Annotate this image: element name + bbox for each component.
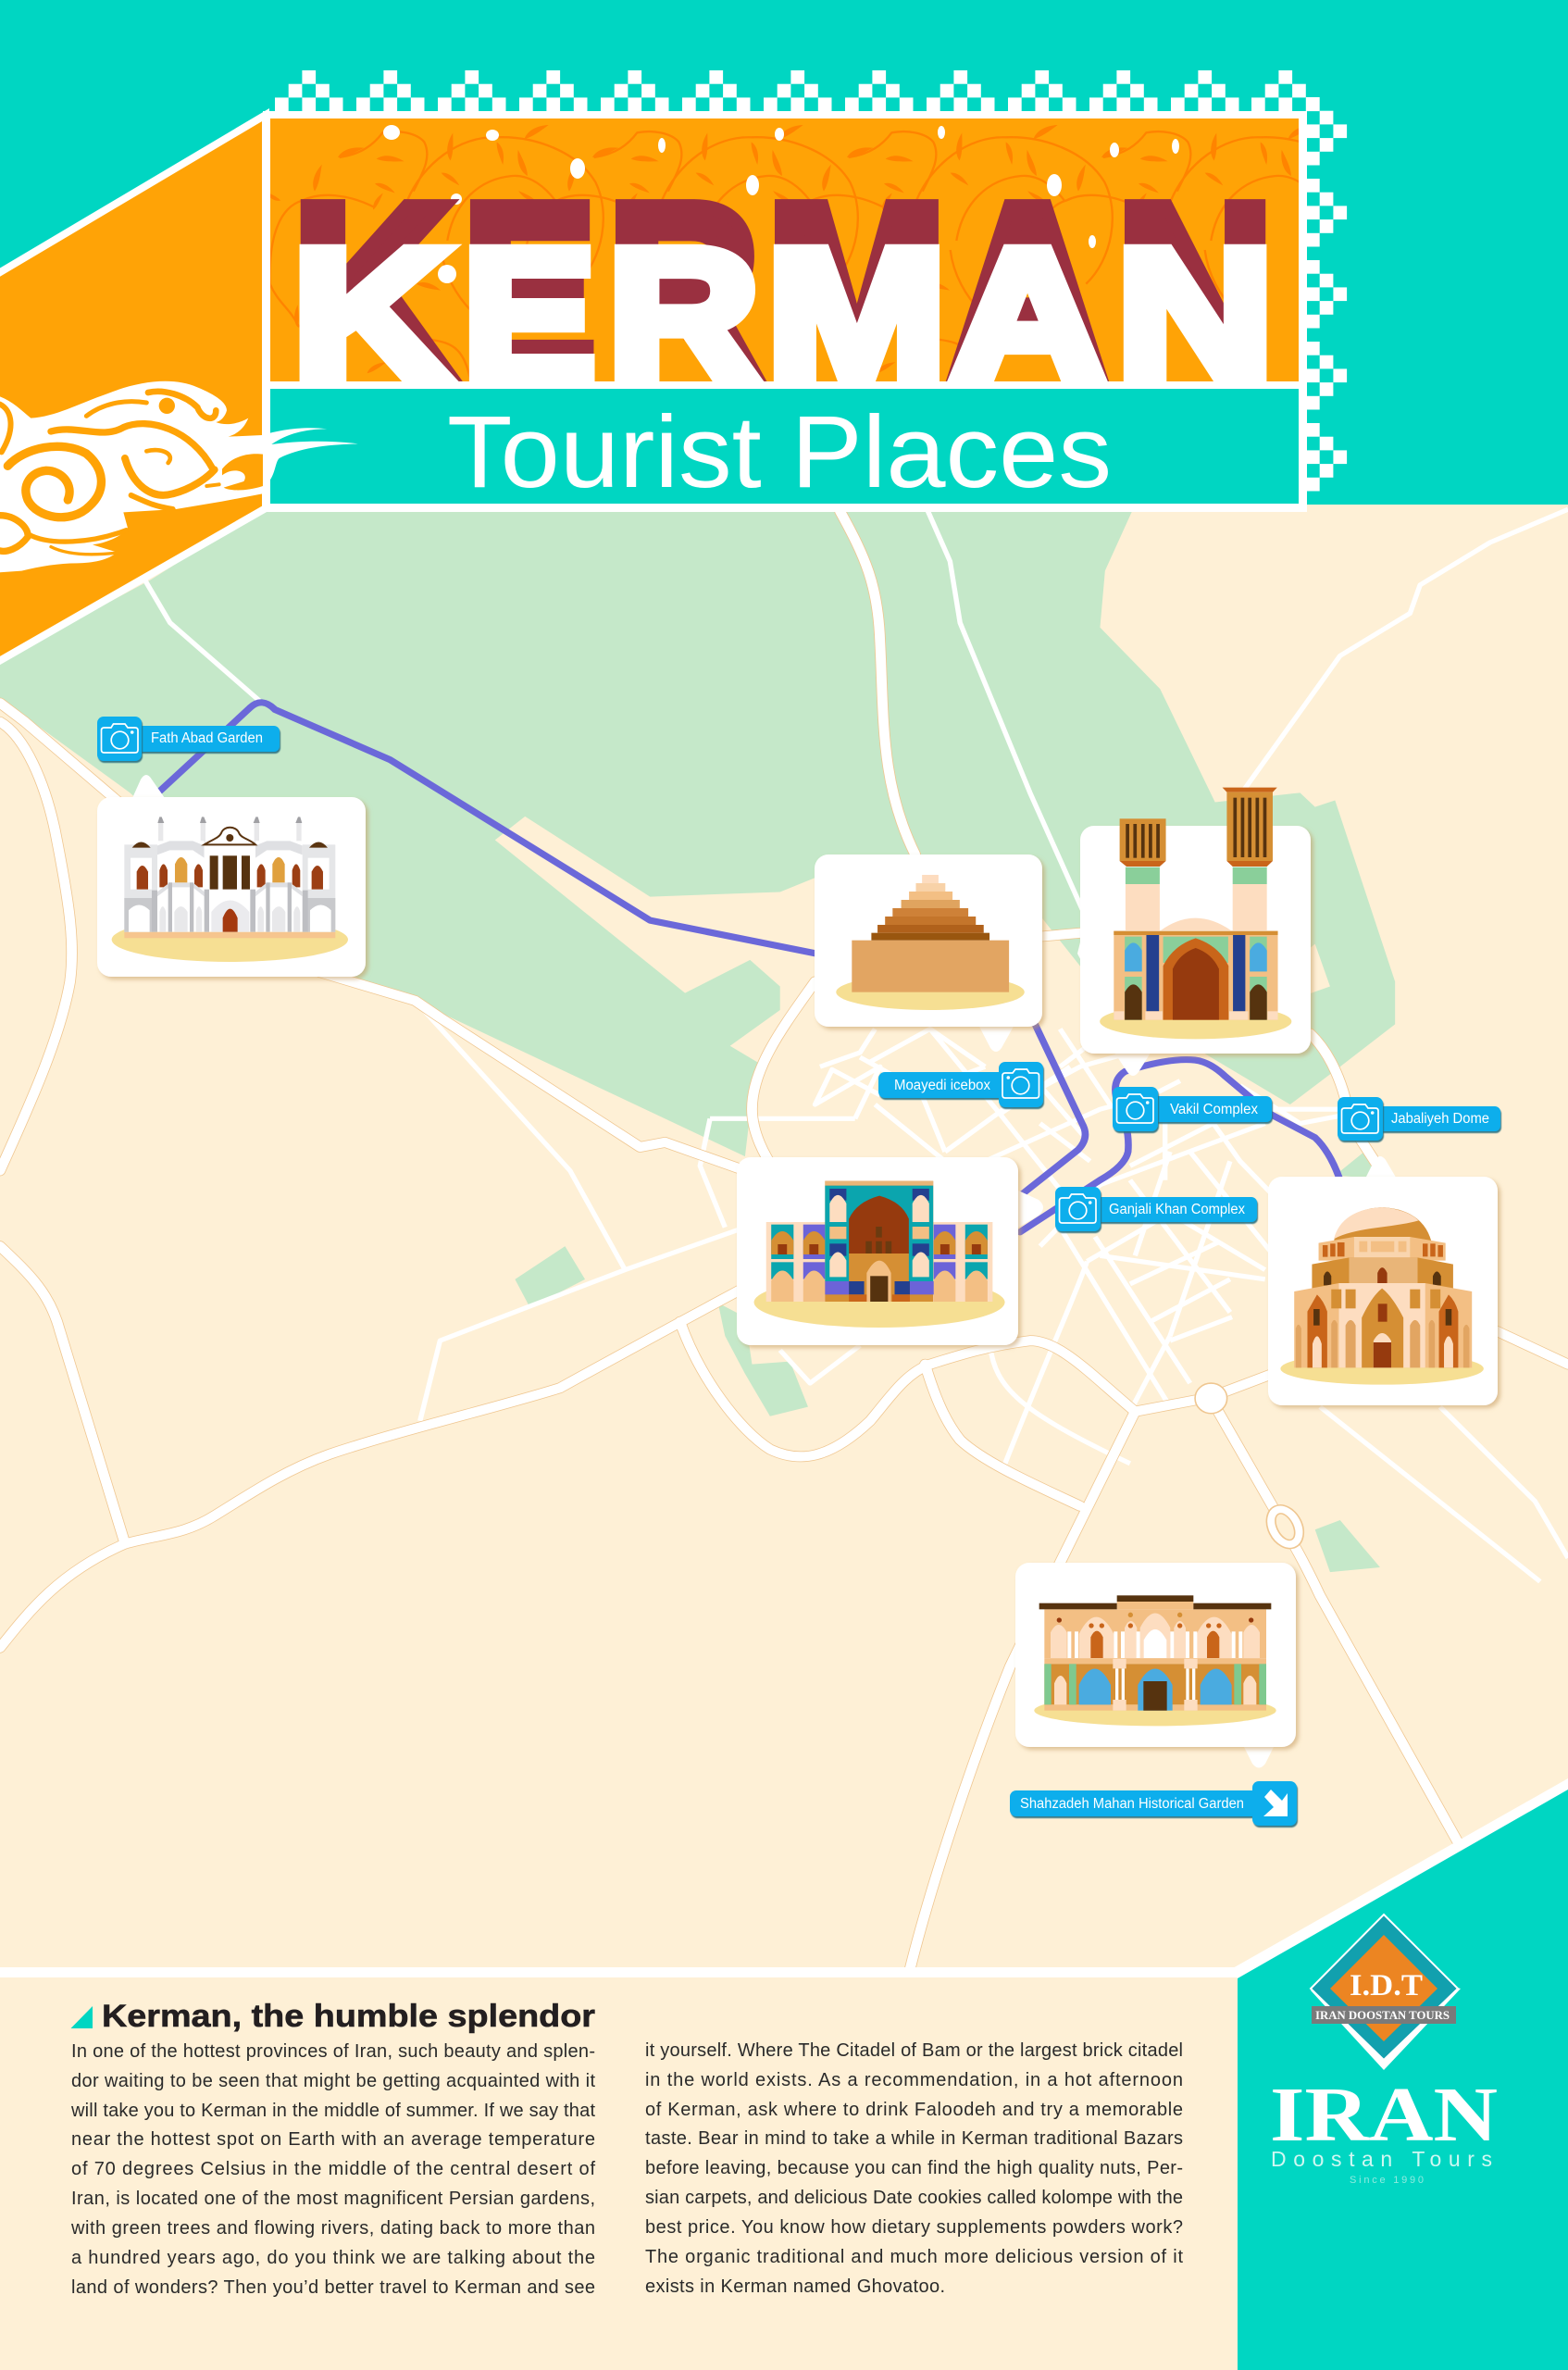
title extrusion: R (608, 155, 760, 427)
green parkland (0, 505, 1395, 1572)
logo: I.D.T diamond: I.D.T (1350, 1969, 1423, 2002)
article text: left column: land of wonders? Then you’d better travel to Kerman and see (71, 2277, 595, 2298)
teal subtitle panel (270, 389, 1299, 504)
title extrusion: E (463, 154, 595, 426)
article text: left column: of 70 degrees Celsius in the middle of the central desert of (71, 2159, 595, 2179)
article text: left column: near the hottest spot on Earth with an average temperature (71, 2129, 595, 2150)
card: Fath Abad Garden (97, 775, 366, 977)
illustration: Vakil complex with windcatchers (1100, 788, 1291, 1039)
article text: right column: before leaving, because you can find the high quality nuts, Per- (645, 2158, 1183, 2178)
article text: right column: sian carpets, and delicious Date cookies called kolompe with the (645, 2188, 1183, 2208)
checker border (275, 70, 1347, 491)
logo wordmark: IRAN (1270, 2072, 1498, 2158)
article text: left column (70, 2041, 595, 2298)
article text: left column: In one of the hottest provinces of Iran, such beauty and splen- (71, 2041, 595, 2062)
title face: A (950, 209, 1105, 422)
article text: right column: exists in Kerman named Ghovatoo. (645, 2276, 945, 2297)
logo wordmark: Since 1990 (1350, 2175, 1424, 2186)
label: Fath Abad Garden: Fath Abad Garden (151, 730, 263, 746)
label: Shahzadeh Mahan Historical Garden (1010, 1781, 1297, 1826)
article text: left column: Iran, is located one of the most magnificent Persian gardens, (71, 2189, 595, 2209)
header teal band (0, 0, 1568, 505)
card: Vakil Complex (1080, 788, 1311, 1076)
logo wordmark (1270, 2072, 1498, 2186)
title extrusion: M (766, 154, 946, 426)
label: Shahzadeh Mahan Historical Garden: Shahzadeh Mahan Historical Garden (1020, 1796, 1244, 1812)
article text: left column: a hundred years ago, do you think we are talking about the (71, 2248, 595, 2268)
logo: I.D.T diamond (1311, 1915, 1461, 2070)
label: Vakil Complex (1113, 1087, 1272, 1131)
article text: right column: it yourself. Where The Citadel of Bam or the largest brick citadel (645, 2040, 1183, 2061)
card: Moayedi icebox (815, 854, 1042, 1052)
label: Fath Abad Garden (97, 717, 280, 761)
tour route (160, 703, 1340, 1232)
illustration: Moayedi icehouse (836, 875, 1025, 1010)
article text: right column (645, 2040, 1183, 2297)
label: Vakil Complex: Vakil Complex (1170, 1102, 1258, 1117)
label: Jabaliyeh Dome (1338, 1097, 1500, 1141)
illustration: Ganjali Khan complex (754, 1181, 1005, 1328)
article text: right column: best price. You know how dietary supplements powders work? (645, 2217, 1183, 2238)
card: Shahzadeh Mahan Historical Garden (1015, 1563, 1296, 1768)
minor streets (145, 505, 1568, 1581)
title extrusion: K (292, 155, 451, 427)
title face: M (766, 209, 946, 422)
tribal ornament (0, 381, 358, 572)
title extrusion: A (950, 154, 1105, 426)
map: terrain and streets (0, 505, 1568, 1969)
article text: right column: of Kerman, ask where to drink Faloodeh and try a memorable (645, 2100, 1183, 2120)
logo: I.D.T diamond: IRAN DOOSTAN TOURS (1315, 2008, 1450, 2022)
title extrusion (300, 199, 1266, 381)
article heading: Kerman, the humble splendor (102, 1999, 595, 2034)
label: Moayedi icebox (878, 1062, 1043, 1107)
article text: left column: will take you to Kerman in the middle of summer. If we say that (70, 2101, 595, 2121)
cream patches in parkland (1280, 944, 1330, 1001)
card: Ganjali Khan Complex (737, 1157, 1043, 1345)
orange left banner (0, 115, 266, 671)
title face: E (463, 210, 595, 422)
label: Ganjali Khan Complex (1055, 1187, 1257, 1231)
article text: right column: taste. Bear in mind to take a while in Kerman traditional Bazars (645, 2128, 1183, 2149)
card: Jabaliyeh Dome (1268, 1156, 1498, 1405)
title face: N (1116, 209, 1274, 422)
icon: arrow (1263, 1790, 1288, 1816)
article text: left column: with green trees and flowing rivers, dating back to more than (70, 2218, 595, 2239)
roundabouts (1195, 1383, 1311, 1554)
title face: R (608, 209, 760, 422)
title frame (263, 111, 1367, 512)
article text: right column: The organic traditional and much more delicious version of it (645, 2247, 1183, 2267)
footer panel (0, 1967, 1568, 2370)
article text: left column: dor waiting to be seen that might be getting acquainted with it (71, 2071, 595, 2091)
article text: right column: in the world exists. As a recommendation, in a hot afternoon (645, 2070, 1183, 2090)
label: Ganjali Khan Complex: Ganjali Khan Complex (1109, 1202, 1245, 1217)
illustration: Fath Abad palace (112, 817, 348, 962)
main roads (0, 511, 1568, 1969)
label: Jabaliyeh Dome: Jabaliyeh Dome (1391, 1111, 1489, 1127)
title: KERMAN (300, 199, 1266, 381)
logo wordmark: Doostan Tours (1271, 2147, 1492, 2171)
title face: K (292, 209, 451, 421)
subtitle: Tourist Places: Tourist Places (447, 395, 1112, 509)
orange title panel with vines (263, 118, 1367, 389)
title extrusion: N (1116, 154, 1274, 426)
map background (0, 500, 1568, 1981)
logo corner panel (1231, 1778, 1568, 2370)
title face (300, 244, 1266, 381)
illustration: Mahan garden pavilion (1034, 1595, 1276, 1726)
illustration: Jabaliyeh dome (1280, 1207, 1484, 1385)
label: Moayedi icebox: Moayedi icebox (894, 1078, 990, 1093)
